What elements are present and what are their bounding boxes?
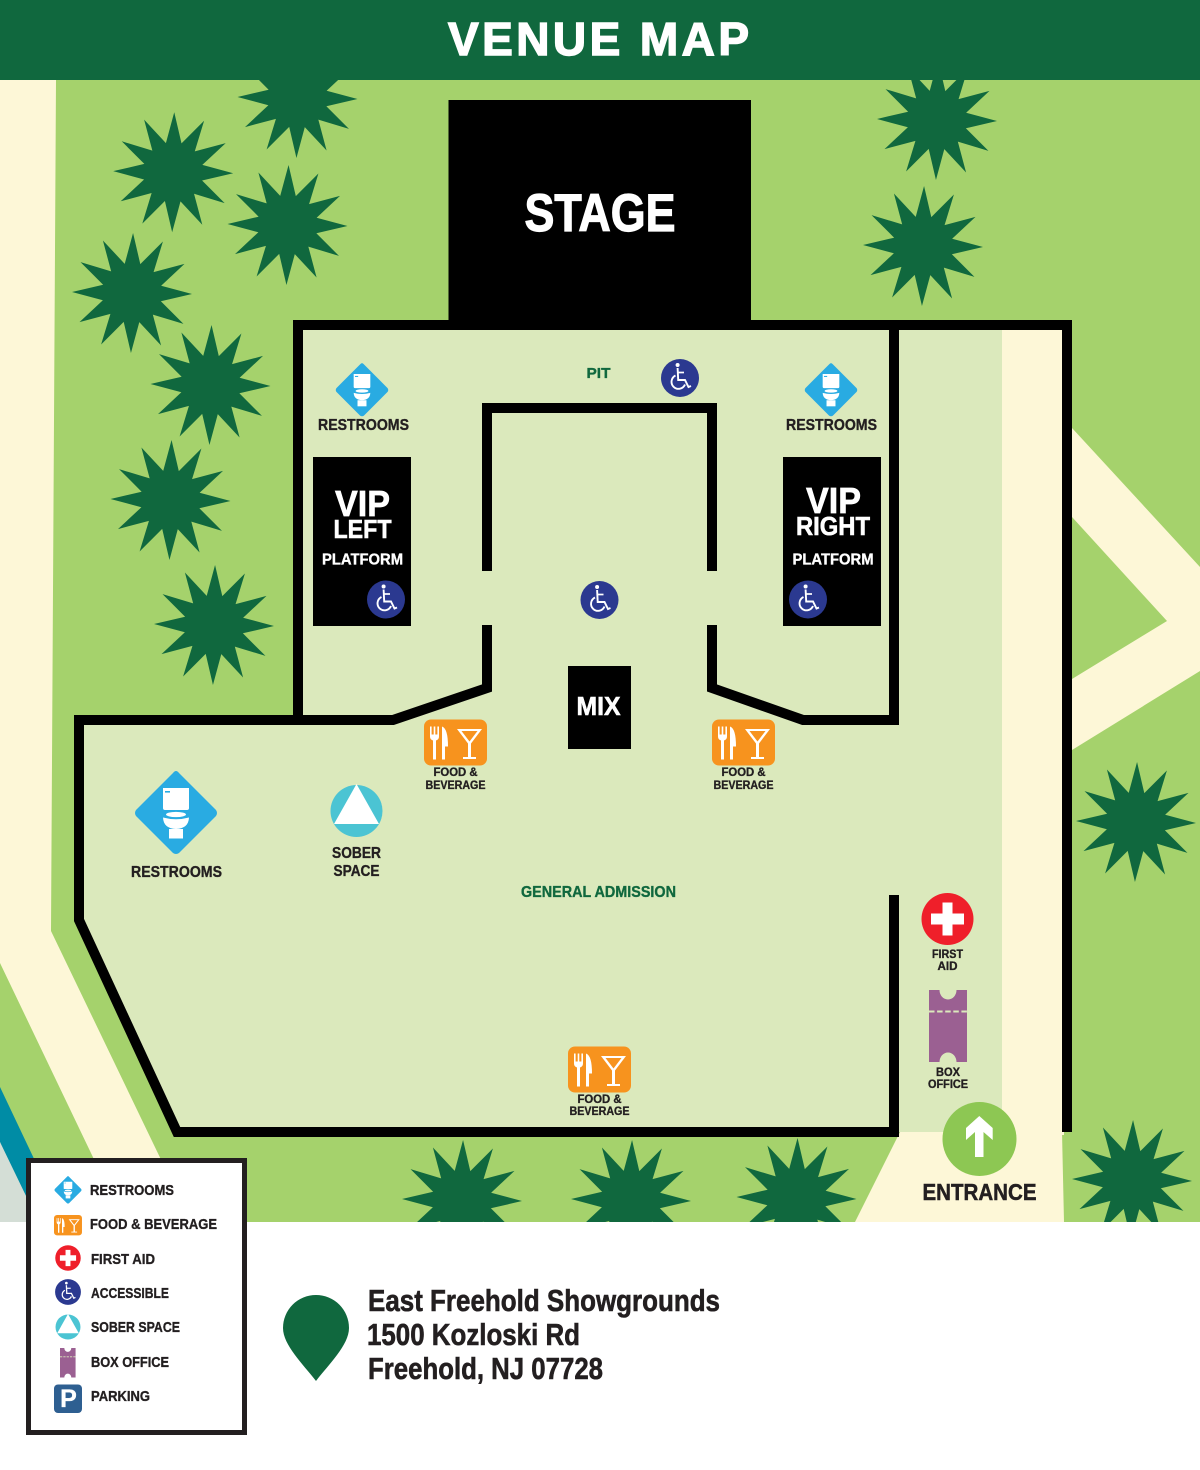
vip left platform	[313, 457, 411, 626]
icon: accessible pit	[661, 359, 699, 397]
restrooms left	[318, 363, 409, 434]
legend: box office	[60, 1348, 169, 1378]
first aid	[922, 893, 974, 973]
title banner: VENUE MAP	[448, 13, 749, 65]
legend: parking: P	[60, 1385, 77, 1413]
first aid: AID	[938, 959, 958, 973]
legend: food and beverage	[54, 1215, 217, 1235]
label: general admission: GENERAL ADMISSION	[521, 884, 676, 901]
footer background	[0, 1222, 1200, 1470]
vip left platform: VIP	[335, 483, 390, 524]
restrooms right: RESTROOMS	[786, 417, 877, 434]
mix tent	[568, 666, 631, 749]
food and beverage right: FOOD &	[722, 765, 766, 779]
sober space: SPACE	[334, 863, 380, 880]
first aid: FIRST	[932, 947, 964, 961]
legend: sober space: SOBER SPACE	[91, 1319, 180, 1336]
restrooms right	[786, 363, 877, 434]
entrance	[922, 1102, 1036, 1205]
sober space: SOBER	[332, 845, 381, 862]
legend: box office: BOX OFFICE	[91, 1354, 169, 1371]
food and beverage right	[712, 720, 775, 792]
entrance walkway	[855, 1132, 1064, 1222]
restrooms left: RESTROOMS	[318, 417, 409, 434]
sober space	[330, 784, 382, 880]
box office	[928, 990, 968, 1091]
address: 1500 Kozloski Rd	[367, 1317, 580, 1352]
icon: accessible centre	[580, 581, 618, 619]
address: Freehold, NJ 07728	[368, 1351, 603, 1386]
vip left platform: PLATFORM	[322, 552, 403, 569]
trees	[71, 37, 1197, 1261]
restrooms large: RESTROOMS	[131, 864, 222, 881]
address	[367, 1283, 720, 1386]
legend: restrooms: RESTROOMS	[90, 1182, 174, 1199]
food and beverage bottom: BEVERAGE	[570, 1104, 630, 1118]
venue ground	[79, 325, 1002, 1132]
food and beverage right: BEVERAGE	[714, 778, 774, 792]
address: East Freehold Showgrounds	[368, 1283, 720, 1318]
legend: first aid	[55, 1245, 155, 1271]
vip right platform	[783, 457, 881, 626]
legend: accessible: ACCESSIBLE	[91, 1285, 169, 1302]
left road	[0, 80, 191, 1222]
vip right platform: PLATFORM	[792, 552, 874, 569]
food and beverage left	[424, 720, 487, 792]
right access road	[1072, 428, 1200, 750]
legend: parking	[54, 1384, 150, 1413]
entrance: ENTRANCE	[922, 1179, 1036, 1205]
venue walls	[79, 325, 1067, 1132]
stage	[448, 100, 751, 322]
legend: food and beverage: FOOD & BEVERAGE	[90, 1216, 217, 1233]
vip right platform: VIP	[806, 480, 861, 521]
water stream	[0, 1087, 64, 1222]
vip right platform: RIGHT	[796, 511, 870, 541]
title banner	[0, 0, 1200, 80]
icon: location pin	[283, 1295, 349, 1381]
food and beverage left: BEVERAGE	[426, 778, 486, 792]
legend: first aid: FIRST AID	[91, 1251, 155, 1268]
legend: accessible	[55, 1279, 169, 1305]
box office: BOX	[936, 1065, 960, 1079]
label: pit: PIT	[586, 365, 610, 382]
mix tent: MIX	[576, 691, 621, 721]
box office: OFFICE	[928, 1077, 968, 1091]
stage: STAGE	[524, 184, 676, 243]
gray shore	[0, 1142, 28, 1222]
cream lane	[1002, 325, 1064, 1135]
food and beverage bottom	[568, 1046, 631, 1118]
legend	[28, 1160, 244, 1432]
legend: sober space	[56, 1314, 180, 1339]
ground	[0, 80, 1200, 1222]
food and beverage left: FOOD &	[434, 765, 478, 779]
food and beverage bottom: FOOD &	[578, 1092, 622, 1106]
legend: parking: PARKING	[91, 1388, 150, 1405]
legend: restrooms	[54, 1176, 174, 1204]
restrooms large	[131, 771, 222, 881]
vip left platform: LEFT	[334, 514, 392, 544]
